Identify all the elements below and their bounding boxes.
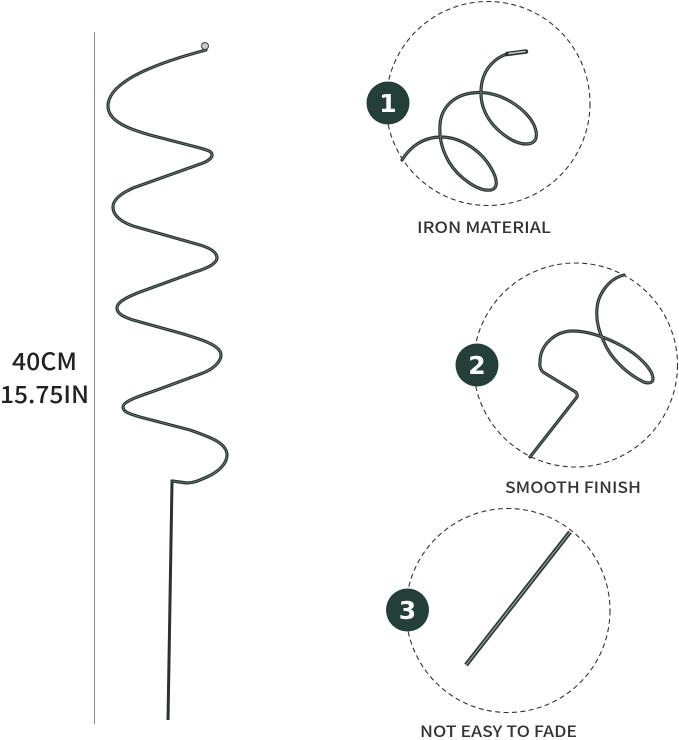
number badge 1: [366, 82, 410, 124]
detail circle 3: [406, 508, 610, 712]
detail circle 1: [386, 2, 590, 206]
label: iron material: IRON MATERIAL: [417, 216, 551, 238]
height scale line: [94, 32, 96, 724]
height dimension label: 40CM: [12, 342, 77, 377]
panel: iron material: [366, 2, 590, 238]
number badge 1: 1: [379, 89, 397, 118]
label: smooth finish: SMOOTH FINISH: [505, 476, 641, 498]
number badge 2: [456, 344, 498, 386]
height dimension label: 15.75IN: [0, 375, 89, 410]
height dimension label: [0, 342, 89, 410]
panel: smooth finish: [456, 263, 678, 498]
number badge 3: [386, 588, 429, 632]
bend close-up: [530, 275, 653, 457]
panel: not easy to fade: [386, 508, 610, 740]
detail circle 2: [474, 263, 678, 467]
coil close-up: [402, 52, 536, 190]
number badge 2: 2: [468, 351, 486, 380]
straight stem close-up: [466, 532, 570, 665]
spiral plant support stake: [108, 42, 227, 720]
number badge 3: 3: [399, 596, 416, 625]
